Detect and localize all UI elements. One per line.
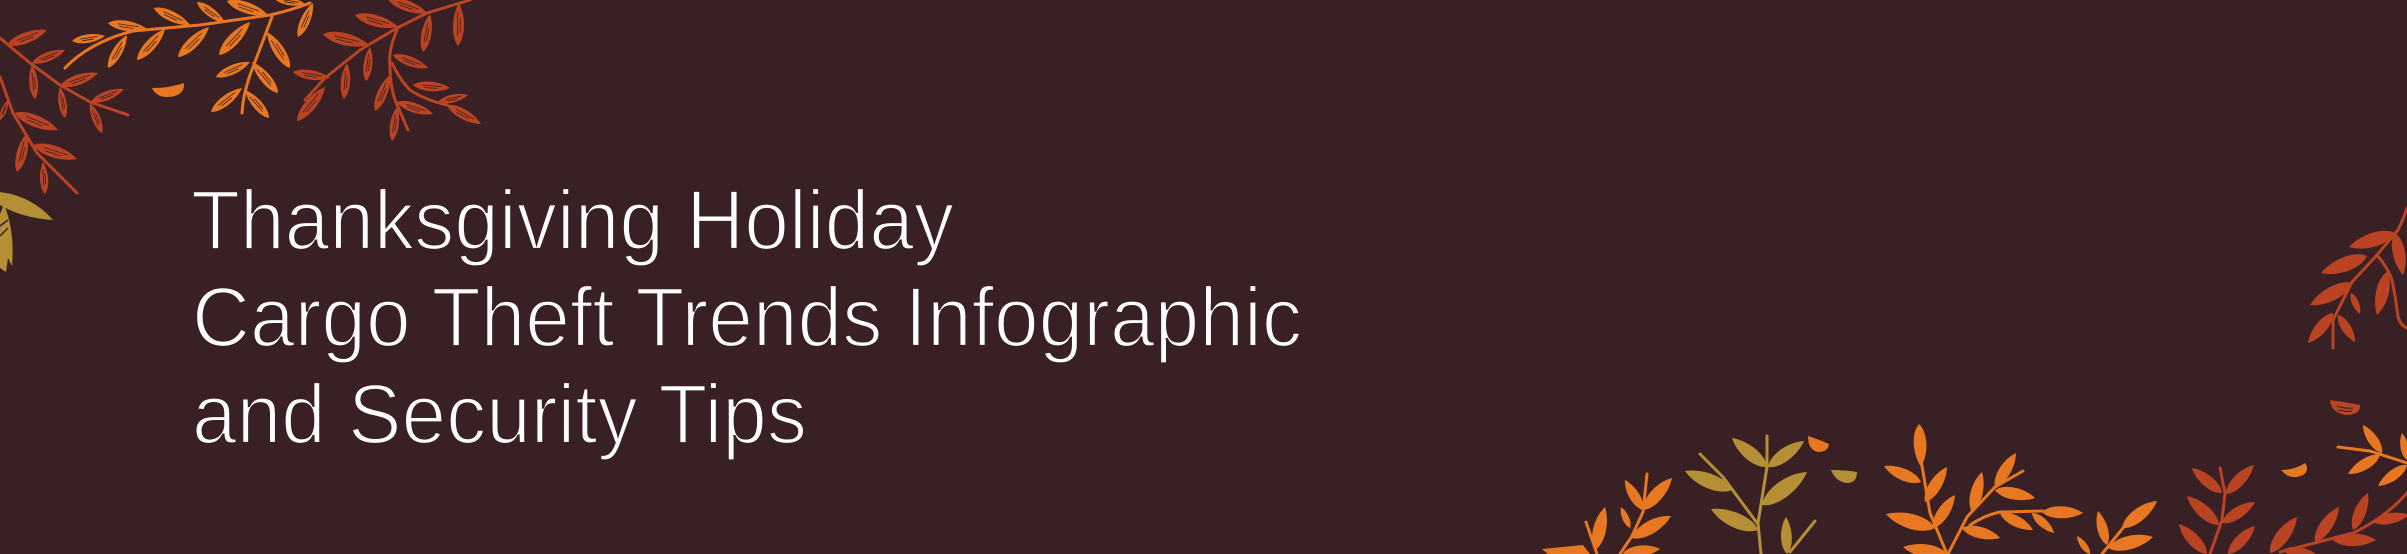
title — [191, 173, 1302, 461]
icon: gold leaves left edge — [0, 192, 53, 272]
title: and Security Tips — [192, 367, 807, 461]
icon: gold sprig bottom — [1682, 433, 1815, 554]
title: Cargo Theft Trends Infographic — [192, 270, 1302, 364]
icon: orange sprig bottom 3 — [2074, 496, 2161, 554]
title: Thanksgiving Holiday — [191, 173, 954, 267]
icon: orange sprig bottom 1 — [1542, 474, 1677, 554]
icon: red branch top centre-left — [292, 0, 483, 142]
icon: red branch right edge — [2304, 208, 2407, 348]
icon: orange branch top left — [65, 0, 317, 121]
icon: orange branch bottom 2 — [1882, 424, 2083, 554]
icon: red branch far left — [0, 25, 128, 194]
icon: red branch bottom right — [2265, 491, 2407, 554]
icon: fallen petals bottom — [1808, 400, 2360, 483]
icon: orange branch right edge — [2338, 422, 2407, 490]
icon: red sprig bottom — [2174, 461, 2259, 554]
